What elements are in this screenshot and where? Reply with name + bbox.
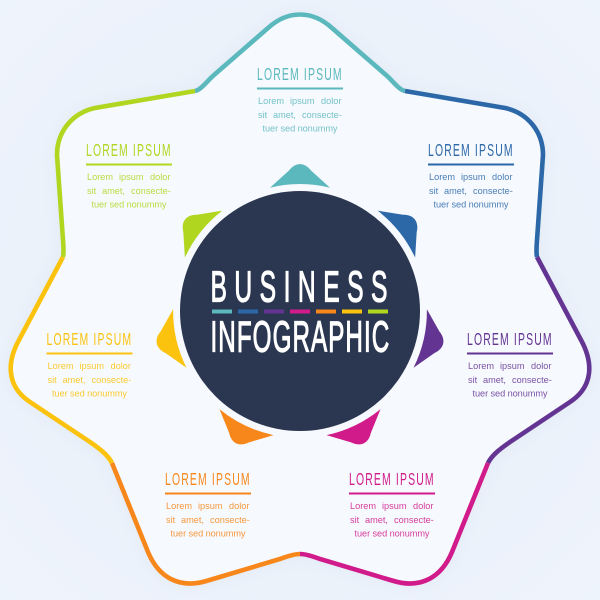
text block: orange: amet, xyxy=(181,515,204,525)
text block: teal: sit xyxy=(258,110,268,120)
text block: orange: LOREM IPSUM xyxy=(165,470,250,490)
text block: green: amet, xyxy=(102,186,125,196)
text block: blue: LOREM IPSUM xyxy=(428,141,513,161)
text block: orange: dolor xyxy=(229,501,249,511)
text block: magenta xyxy=(349,470,435,538)
text block: yellow xyxy=(46,330,132,398)
text block: magenta: amet, xyxy=(365,515,388,525)
text block: purple: amet, xyxy=(483,375,506,385)
text block: magenta: ipsum xyxy=(382,501,407,511)
text block: green xyxy=(86,141,172,210)
text block: green: Lorem xyxy=(87,172,113,182)
text block: purple: consecte- xyxy=(512,375,552,385)
text block: teal: consecte- xyxy=(302,110,342,120)
text block: orange: sit xyxy=(166,515,176,525)
text block: orange: tuer sed nonummy xyxy=(170,528,246,538)
text block: yellow: sit xyxy=(48,375,57,385)
title: BUSINESS: BUSINESS xyxy=(210,262,387,312)
text block: purple: sit xyxy=(468,375,478,385)
text block: teal: amet, xyxy=(273,110,296,120)
text block: teal: dolor xyxy=(321,96,341,106)
text block: magenta: Lorem xyxy=(350,501,376,511)
title: INFOGRAPHIC: INFOGRAPHIC xyxy=(210,312,389,362)
text block: green: tuer sed nonummy xyxy=(92,200,167,210)
colour bars xyxy=(212,310,388,314)
text block: yellow: consecte- xyxy=(92,375,131,385)
text block: teal: Lorem xyxy=(258,96,284,106)
text block: green: ipsum xyxy=(119,172,144,182)
text block: purple: dolor xyxy=(531,361,551,371)
central circle xyxy=(180,191,420,431)
text block: blue: sit xyxy=(429,186,439,196)
text block: blue: consecte- xyxy=(473,186,513,196)
text block: orange: ipsum xyxy=(198,501,223,511)
text block: purple: tuer sed nonummy xyxy=(472,388,548,398)
text block: yellow: Lorem xyxy=(48,361,74,371)
text block: yellow: dolor xyxy=(110,361,131,371)
text block: magenta: dolor xyxy=(413,501,433,511)
text block: blue: dolor xyxy=(492,172,512,182)
text block: purple: ipsum xyxy=(500,361,525,371)
text block: blue: ipsum xyxy=(461,172,486,182)
text block: green: LOREM IPSUM xyxy=(86,141,171,161)
text block: blue: tuer sed nonummy xyxy=(434,200,509,210)
text block: teal xyxy=(257,65,343,134)
text block: orange: consecte- xyxy=(210,515,250,525)
text block: green: sit xyxy=(87,186,97,196)
text block: magenta: consecte- xyxy=(394,515,434,525)
text block: orange xyxy=(165,470,251,538)
pointers around the circle xyxy=(150,164,450,456)
text block: green: consecte- xyxy=(131,186,171,196)
text block: yellow: ipsum xyxy=(80,361,104,371)
text block: blue xyxy=(428,141,514,210)
text block: blue: amet, xyxy=(444,186,467,196)
text block: orange: Lorem xyxy=(166,501,192,511)
text block: purple: LOREM IPSUM xyxy=(467,330,552,350)
text block: teal: LOREM IPSUM xyxy=(257,65,342,85)
text block: green: dolor xyxy=(150,172,170,182)
text block: yellow: amet, xyxy=(62,375,85,385)
text block: magenta: sit xyxy=(350,515,360,525)
text block: teal: tuer sed nonummy xyxy=(262,124,338,134)
text block: yellow: tuer sed nonummy xyxy=(52,388,127,398)
text block: blue: Lorem xyxy=(429,172,455,182)
text block: magenta: tuer sed nonummy xyxy=(354,528,430,538)
text block: yellow: LOREM IPSUM xyxy=(46,330,131,350)
text block: teal: ipsum xyxy=(290,96,315,106)
text block: purple: Lorem xyxy=(468,361,494,371)
text block: magenta: LOREM IPSUM xyxy=(349,470,434,490)
text block: purple xyxy=(467,330,553,398)
